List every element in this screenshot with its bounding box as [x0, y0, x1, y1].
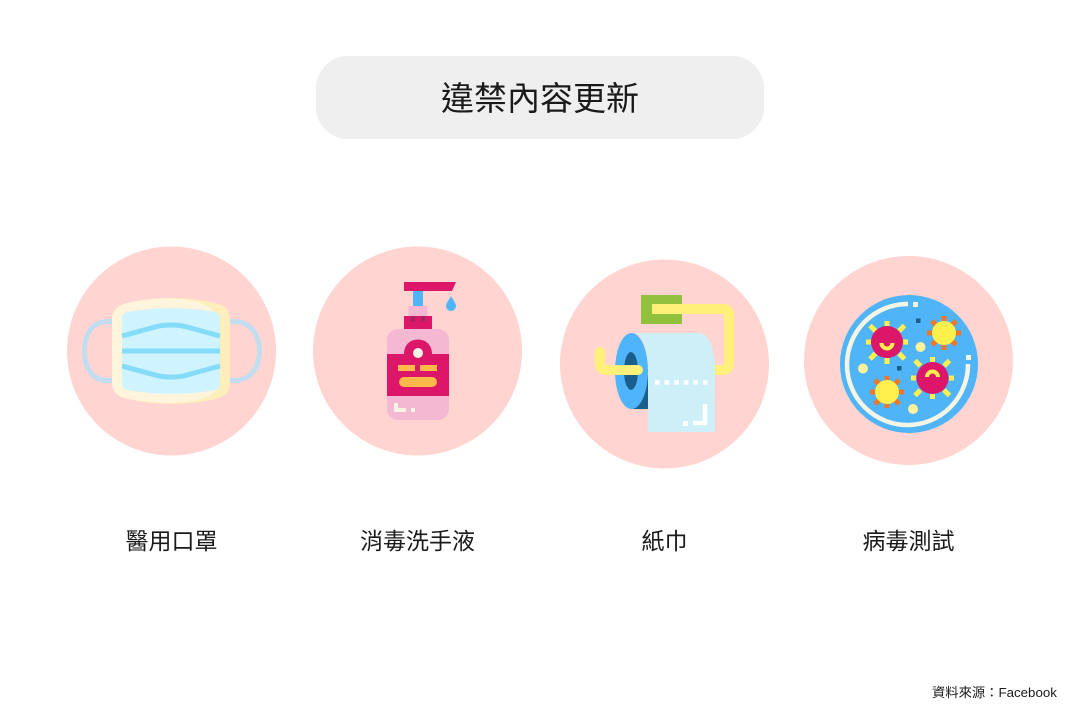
virus 1	[866, 321, 908, 364]
virus 4	[870, 376, 904, 408]
panel: virus test	[804, 256, 1013, 554]
label: 醫用口罩	[126, 528, 218, 554]
title pill	[316, 56, 764, 139]
virus 3	[911, 357, 954, 399]
icon: pump bottle	[387, 282, 456, 420]
icon: mask	[84, 298, 260, 404]
label: 病毒測試	[862, 528, 954, 554]
title pill: 違禁內容更新	[441, 80, 639, 117]
panel: medical mask	[67, 246, 276, 554]
label: 紙巾	[642, 528, 688, 554]
virus 2	[927, 316, 961, 350]
panel: hand sanitizer	[313, 246, 522, 554]
source note: 資料來源：Facebook	[932, 685, 1057, 700]
icon: toilet roll	[600, 295, 729, 432]
icon: petri dish	[840, 295, 978, 433]
panel: tissue	[560, 260, 769, 554]
label: 消毒洗手液	[360, 528, 475, 554]
